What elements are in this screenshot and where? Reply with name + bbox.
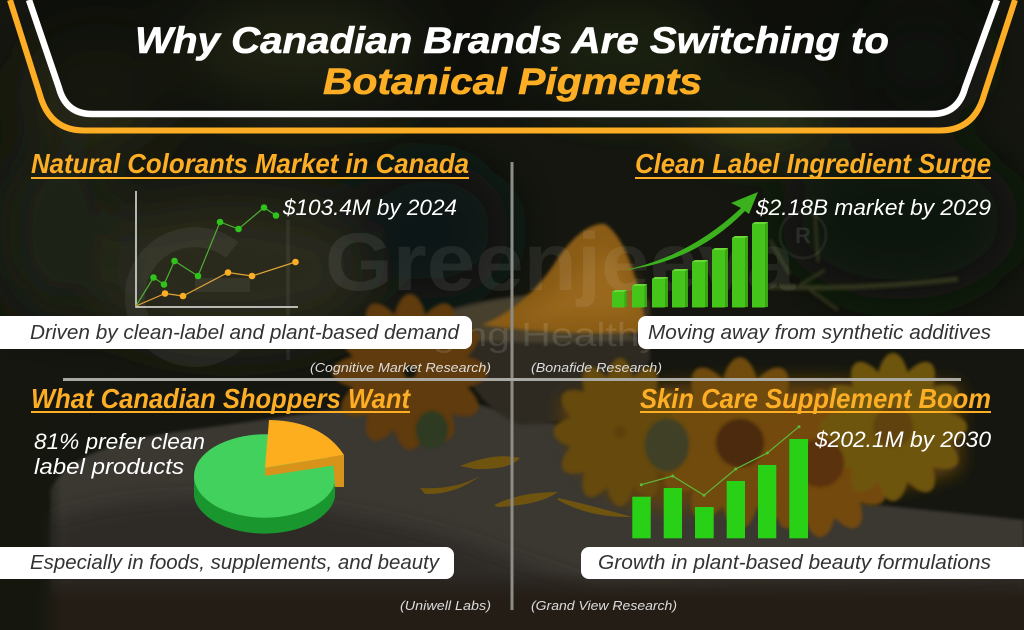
flowers [560,380,960,508]
line chart [136,191,299,307]
watermark: registered mark: R [795,223,811,248]
panel: what shoppers want [0,383,491,613]
watermark: brand logo [135,212,826,360]
stone table [50,395,1024,630]
panel: clean label surge [531,148,1024,375]
stat: $202.1M by 2030 [814,427,992,452]
horizontal divider [63,378,961,381]
callout: Moving away from synthetic additives [648,321,991,344]
source: (Cognitive Market Research) [310,360,491,375]
heading: Skin Care Supplement Boom [640,383,991,414]
callout: Growth in plant-based beauty formulations [598,551,991,574]
source: (Bonafide Research) [531,360,662,375]
heading: Natural Colorants Market in Canada [31,148,469,179]
fallen petals [420,456,632,517]
callout: Driven by clean-label and plant-based demand [30,321,460,344]
stat: 81% prefer clean [34,429,205,454]
header frame [10,0,1015,130]
callout [581,547,1024,579]
callout [638,316,1024,349]
3D pie chart [194,420,344,534]
panel: skin care supplement boom [531,383,1024,613]
callout [0,316,472,349]
title [135,20,889,102]
title: Botanical Pigments [323,61,702,102]
bar and line chart [632,425,808,538]
plant stem [770,215,958,310]
watermark: tagline: Bringing Healthy [360,316,661,353]
panel: natural colorants market [0,148,491,375]
heading: Clean Label Ingredient Surge [635,148,991,179]
watermark: brand name: Greenjeeva [325,217,796,308]
vertical divider [510,162,514,610]
arrow [625,192,758,270]
stat: $2.18B market by 2029 [755,195,991,220]
callout [0,547,454,579]
title: Why Canadian Brands Are Switching to [135,20,889,61]
heading: What Canadian Shoppers Want [31,383,412,414]
stat: label products [34,454,184,479]
source: (Uniwell Labs) [400,598,491,613]
source: (Grand View Research) [531,598,677,613]
callout: Especially in foods, supplements, and beauty [30,551,441,574]
stat [34,429,205,479]
3D bar chart with growth arrow [612,192,768,308]
bowl and turmeric powder [446,294,650,425]
stat: $103.4M by 2024 [282,195,457,220]
